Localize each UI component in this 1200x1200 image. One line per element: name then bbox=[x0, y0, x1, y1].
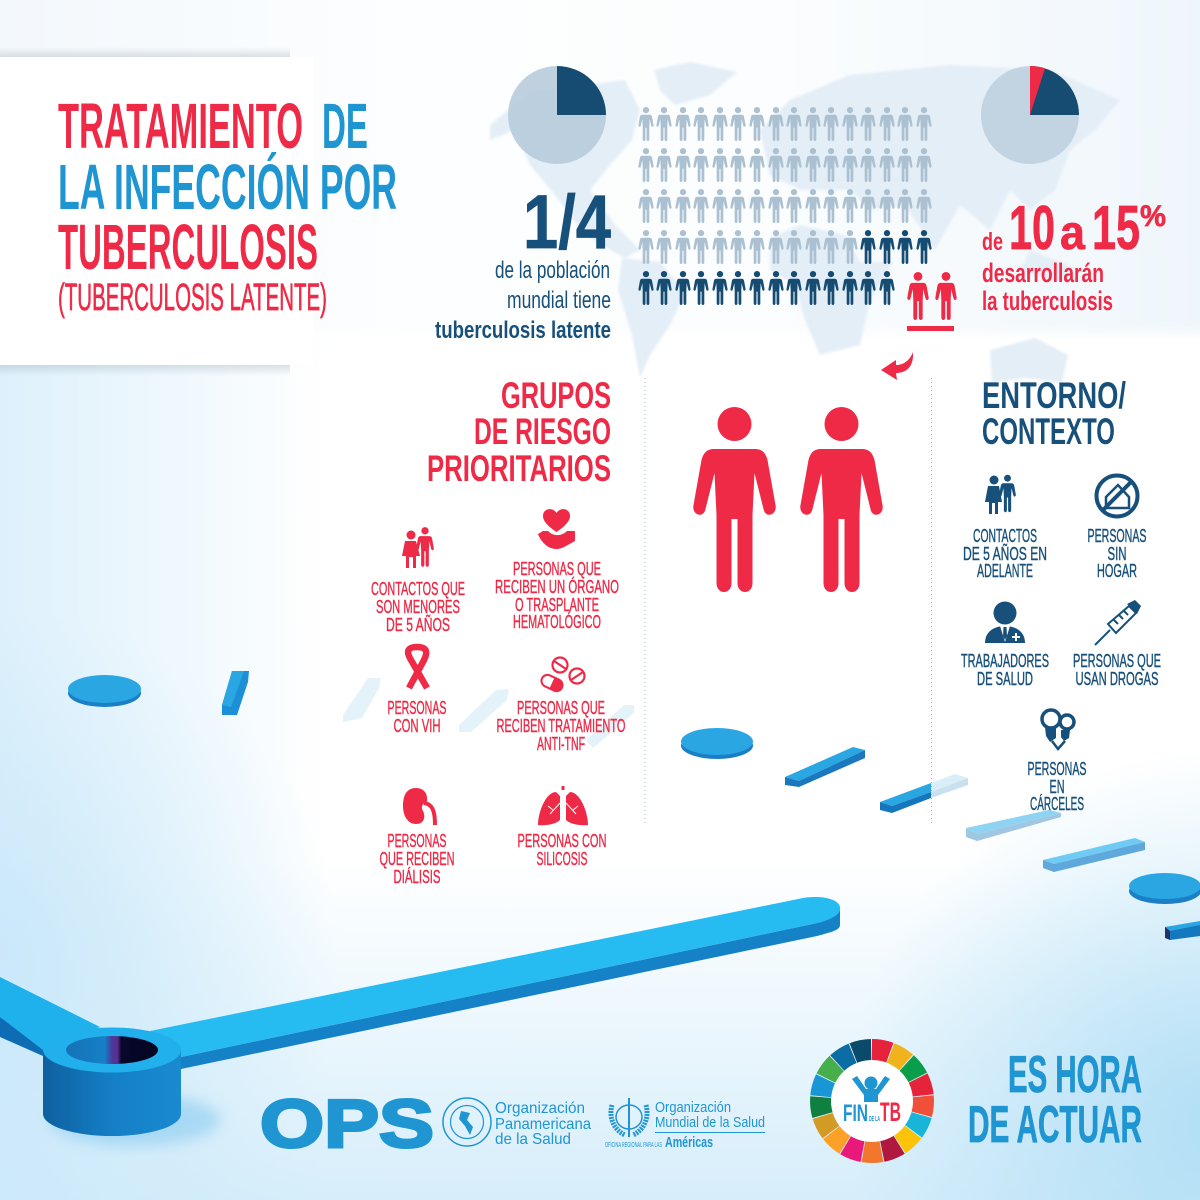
item: carceles: CÁRCELES bbox=[1030, 794, 1084, 814]
stat: 10 to 15 percent: % bbox=[1140, 200, 1166, 233]
world map bbox=[490, 62, 1120, 383]
item: contactos menores: DE 5 AÑOS bbox=[386, 614, 450, 635]
panel: title bbox=[0, 47, 397, 376]
disc left bbox=[68, 675, 141, 707]
stat: 10 to 15 percent: 15 bbox=[1092, 194, 1140, 263]
dark people bbox=[638, 230, 932, 305]
logo: OPS: de la Salud bbox=[495, 1131, 571, 1148]
logo: OPS: Panamericana bbox=[495, 1116, 591, 1133]
item: usan drogas bbox=[1073, 600, 1161, 689]
item: contactos menores: SON MENORES bbox=[376, 597, 460, 617]
stat: one quarter: tuberculosis latente bbox=[435, 317, 611, 344]
stat: 10 to 15 percent: la tuberculosis bbox=[982, 286, 1113, 316]
item: silicosis: PERSONAS CON bbox=[518, 831, 606, 851]
pie chart: 10 to 15 percent bbox=[981, 66, 1079, 164]
item: silicosis bbox=[518, 786, 606, 869]
heading: grupos de riesgo bbox=[427, 375, 611, 489]
item: vih: CON VIH bbox=[394, 716, 440, 736]
long bar bbox=[181, 910, 840, 1069]
item: carceles bbox=[1028, 710, 1086, 814]
title: (TUBERCULOSIS LATENTE) bbox=[58, 277, 327, 319]
stat: 10 to 15 percent bbox=[982, 194, 1166, 316]
3D shapes: scattered bars and discs bbox=[68, 671, 1200, 940]
stat: 10 to 15 percent: 10 bbox=[1009, 194, 1055, 263]
people pictogram bbox=[638, 107, 957, 331]
item: silicosis: SILICOSIS bbox=[536, 849, 588, 869]
item: dialisis: PERSONAS bbox=[388, 831, 446, 851]
heading: entorno: ENTORNO/ bbox=[982, 375, 1126, 416]
logo: fin de la TB wheel: DE LA bbox=[869, 1116, 880, 1123]
slogan bbox=[968, 1046, 1142, 1154]
heading: grupos de riesgo: DE RIESGO bbox=[474, 411, 611, 452]
small bar left bbox=[222, 671, 249, 715]
item: trabajadores de salud bbox=[961, 602, 1049, 689]
item: organo: O TRASPLANTE bbox=[515, 595, 599, 615]
item: carceles: EN bbox=[1050, 777, 1064, 797]
item: contactos adultos bbox=[963, 475, 1047, 581]
item: organo: PERSONAS QUE bbox=[513, 559, 601, 579]
item: organo: RECIBEN UN ÓRGANO bbox=[495, 576, 619, 597]
left arm bbox=[0, 1017, 43, 1056]
logo: fin de la TB wheel bbox=[799, 1028, 945, 1174]
logo: fin de la TB wheel: TB bbox=[880, 1097, 901, 1127]
item: sin hogar: SIN bbox=[1108, 544, 1126, 564]
logo: OMS bbox=[605, 1098, 765, 1151]
item: organo: HEMATOLÓGICO bbox=[513, 611, 601, 632]
bar c bbox=[966, 810, 1061, 841]
title: LA INFECCIÓN POR bbox=[58, 151, 397, 223]
logo: OPS: OPS bbox=[260, 1086, 434, 1162]
bar d bbox=[1043, 838, 1145, 872]
item: contactos menores: CONTACTOS QUE bbox=[371, 579, 465, 599]
stat: one quarter: 1/4 bbox=[523, 180, 611, 265]
item: dialisis bbox=[380, 788, 454, 887]
logo: fin de la TB wheel: FIN bbox=[843, 1100, 868, 1127]
stat: 10 to 15 percent: desarrollarán bbox=[982, 258, 1104, 288]
item: sin hogar bbox=[1088, 476, 1146, 581]
item: trabajadores de salud: TRABAJADORES bbox=[961, 651, 1049, 671]
logo: OPS: Organización bbox=[495, 1100, 585, 1117]
ring bbox=[43, 1050, 181, 1114]
logo: OMS: Organización bbox=[655, 1099, 731, 1116]
context items bbox=[961, 475, 1161, 814]
item: contactos adultos: CONTACTOS bbox=[973, 526, 1037, 546]
item: anti-tnf: PERSONAS QUE bbox=[517, 698, 605, 718]
item: dialisis: QUE RECIBEN bbox=[380, 849, 454, 869]
stat: one quarter: mundial tiene bbox=[507, 287, 611, 314]
logo: OMS: Américas bbox=[665, 1134, 713, 1151]
heading: entorno bbox=[982, 375, 1126, 452]
stat: 10 to 15 percent: a bbox=[1060, 207, 1085, 260]
heading: entorno: CONTEXTO bbox=[982, 411, 1115, 452]
title bbox=[58, 90, 397, 319]
heading: grupos de riesgo: PRIORITARIOS bbox=[427, 448, 611, 489]
item: carceles: PERSONAS bbox=[1028, 759, 1086, 779]
title: TRATAMIENTO bbox=[58, 90, 303, 162]
item: dialisis: DIÁLISIS bbox=[394, 867, 440, 887]
item: trabajadores de salud: DE SALUD bbox=[977, 669, 1033, 689]
stat: one quarter: de la población bbox=[495, 257, 610, 284]
item: organo bbox=[495, 509, 619, 632]
item: contactos menores bbox=[371, 527, 465, 635]
small bar right bbox=[1165, 921, 1200, 940]
emblem: WHO bbox=[611, 1098, 647, 1137]
logo: OMS: Mundial de la Salud bbox=[655, 1114, 765, 1131]
item: vih: PERSONAS bbox=[388, 698, 446, 718]
main connector bbox=[0, 897, 840, 1146]
heading: grupos de riesgo: GRUPOS bbox=[501, 375, 611, 416]
item: contactos adultos: ADELANTE bbox=[977, 561, 1033, 581]
arrow bbox=[881, 352, 913, 380]
faded bars bbox=[343, 678, 634, 748]
disc centre bbox=[681, 728, 753, 759]
stat: 10 to 15 percent: de bbox=[982, 228, 1003, 256]
item: sin hogar: HOGAR bbox=[1097, 561, 1137, 581]
item: anti-tnf: ANTI-TNF bbox=[537, 734, 585, 754]
item: contactos adultos: DE 5 AÑOS EN bbox=[963, 543, 1047, 564]
item: anti-tnf bbox=[496, 658, 626, 754]
ring shadow bbox=[50, 1094, 220, 1146]
item: anti-tnf: RECIBEN TRATAMIENTO bbox=[496, 716, 626, 736]
bar a bbox=[785, 747, 865, 787]
pie chart: one quarter bbox=[508, 66, 606, 164]
red people bbox=[907, 272, 957, 331]
title: TUBERCULOSIS bbox=[58, 211, 318, 283]
logo: OPS bbox=[260, 1086, 591, 1162]
logo: OMS: OFICINA REGIONAL PARA LAS bbox=[605, 1142, 662, 1149]
dotted column lines bbox=[645, 378, 932, 825]
emblem: PAHO seal bbox=[443, 1098, 491, 1146]
risk group items bbox=[371, 509, 626, 887]
stat: one quarter bbox=[435, 180, 611, 344]
disc right bbox=[1129, 873, 1200, 904]
item: sin hogar: PERSONAS bbox=[1088, 526, 1146, 546]
bar b bbox=[880, 774, 968, 813]
item: vih bbox=[388, 647, 446, 736]
title: DE bbox=[322, 90, 368, 162]
light people bbox=[638, 107, 932, 264]
big red people bbox=[693, 407, 883, 592]
